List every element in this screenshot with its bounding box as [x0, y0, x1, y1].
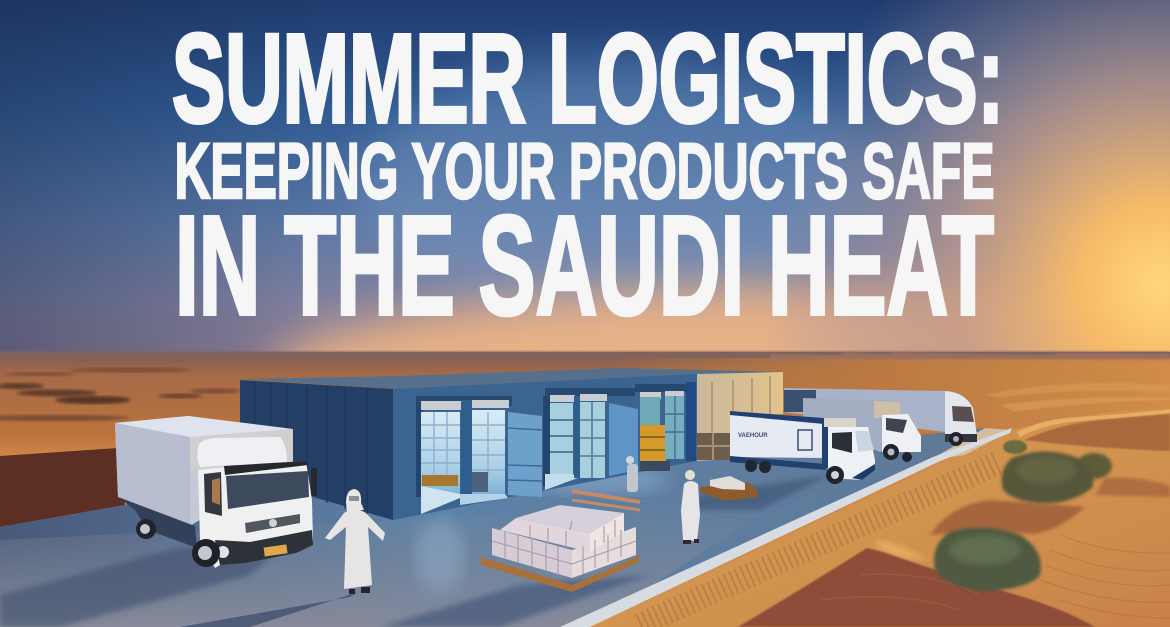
front delivery truck: [730, 411, 875, 484]
tyre tracks in sand: [640, 462, 1000, 625]
warehouse: [240, 368, 783, 520]
dark dune left of truck: [0, 448, 125, 527]
loading door 4: [574, 394, 607, 478]
worker in white robe: [325, 489, 385, 594]
pallet stack of boxes: [481, 505, 639, 592]
facade: [393, 374, 697, 520]
chassis: [118, 497, 197, 548]
loading door 6: [665, 382, 696, 461]
loading door 5: [640, 392, 670, 471]
sandy pad behind trucks: [930, 428, 1012, 460]
foreground dunes right: [590, 409, 1170, 627]
sky background: [0, 0, 1170, 465]
dark front dune: [738, 548, 1095, 627]
cab: [198, 461, 313, 568]
loading door 3: [543, 395, 578, 490]
dune ridge: [1017, 409, 1170, 437]
worker in white coverall: [681, 470, 700, 544]
aero deflector: [197, 437, 287, 467]
large white box truck, left: [115, 416, 317, 568]
worker at door: [626, 456, 638, 492]
shrub: front dune: [934, 528, 1041, 591]
metal cart: [570, 491, 642, 538]
open panel 1: [508, 412, 542, 497]
truck logo text: VAEHOUR: [738, 433, 768, 439]
desert sand background: [0, 351, 1170, 627]
loading door 2: [460, 400, 509, 505]
open panel 2: [609, 403, 638, 476]
door frames: [416, 396, 512, 406]
loading door 1: [416, 401, 461, 514]
horizon haze band: [0, 351, 1170, 358]
shrub: large mid dune: [1002, 452, 1093, 503]
concrete yard floor: [0, 428, 1012, 627]
far ridges right: [985, 383, 1170, 398]
roof: [240, 368, 783, 389]
sand ripples lower right: [1040, 535, 1170, 618]
side wall: [240, 380, 393, 520]
bumper: [215, 530, 313, 565]
shrub: small right: [1076, 453, 1112, 479]
cargo box: [115, 416, 293, 526]
dark dune streaks left: [0, 383, 44, 389]
distant hills: [770, 352, 1170, 360]
middle truck: [803, 398, 921, 462]
yard curb: [560, 428, 1012, 627]
pallet with goods, right: [700, 476, 758, 501]
far truck: [784, 388, 977, 446]
shrub: small far: [1003, 440, 1027, 454]
title: [172, 8, 1004, 344]
grille: [245, 514, 300, 533]
bush shadow: [930, 500, 1085, 535]
beige annex: [697, 372, 783, 461]
